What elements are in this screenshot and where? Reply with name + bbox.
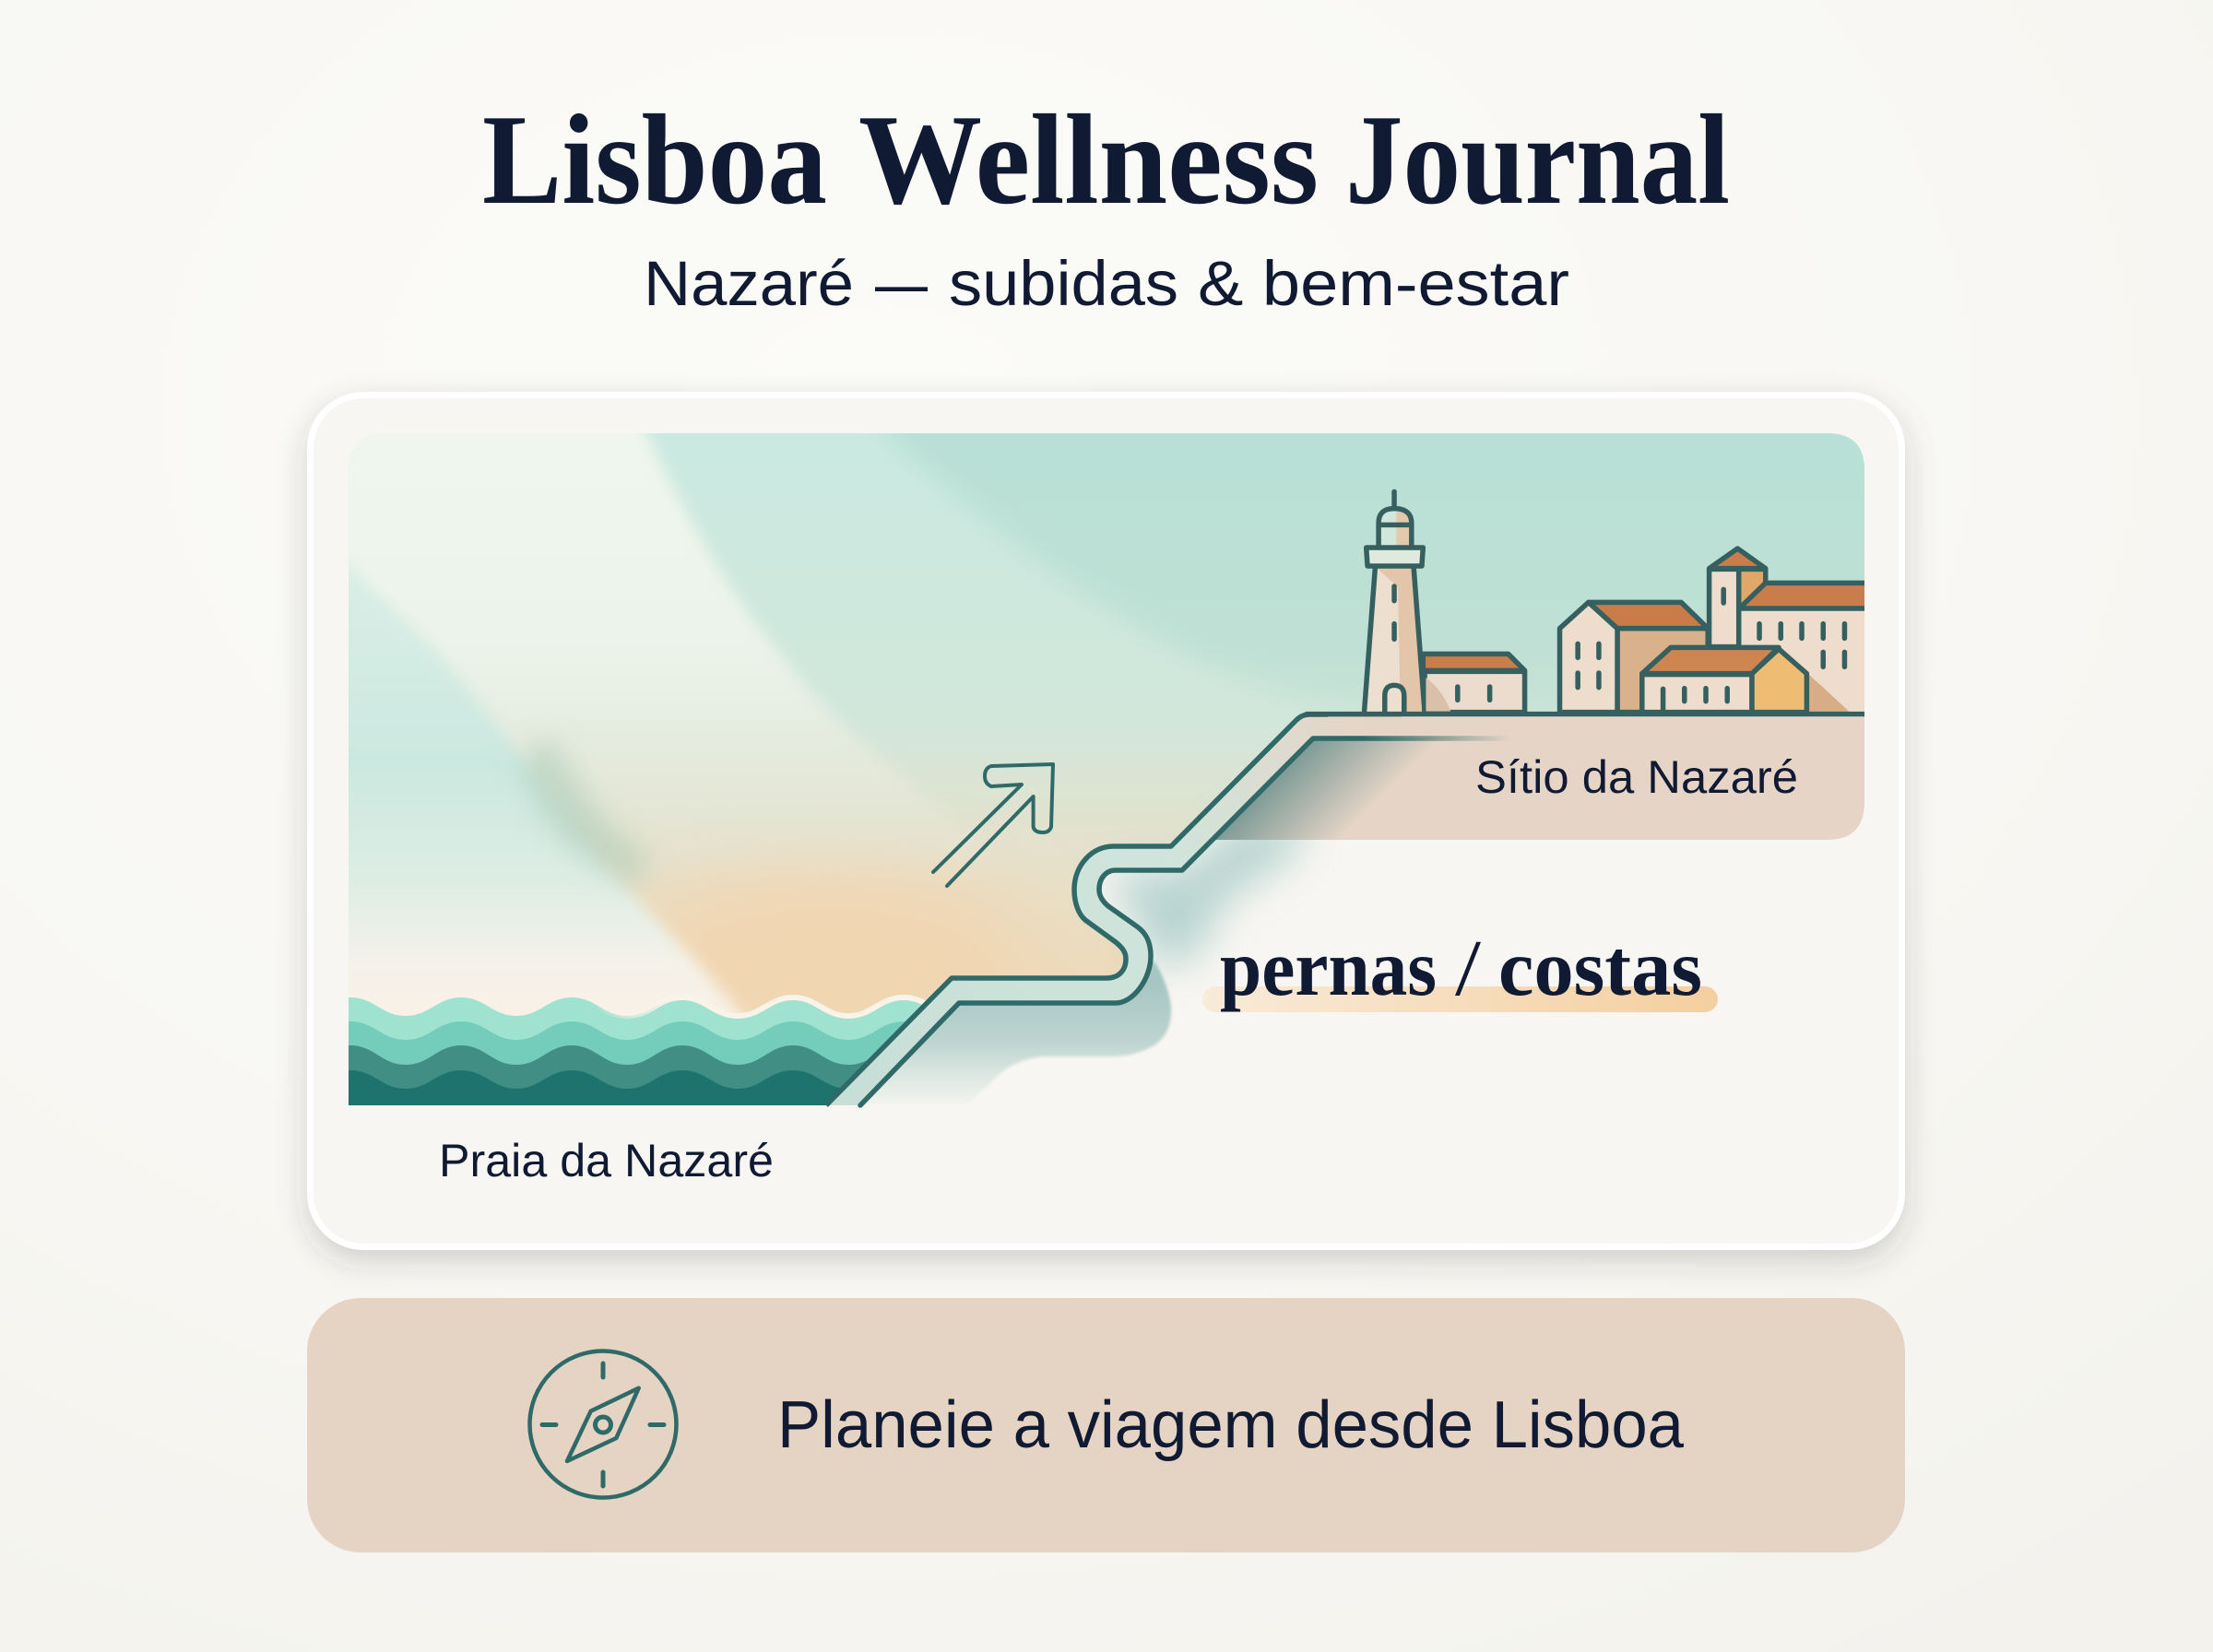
label: Praia da Nazaré: Praia da Nazaré [439,1135,774,1186]
long building and tower [1710,549,1871,713]
ground line [1307,712,1871,716]
town: lighthouse and buildings [1307,491,1871,714]
highlight bar [1202,986,1718,1012]
icon: up arrow [933,764,1053,886]
label: pernas / costas [1220,923,1702,1012]
subtitle: Nazaré [644,248,854,319]
panel: call to action [307,1298,1905,1552]
panel: illustration card [310,395,1901,1246]
waves [349,995,926,1105]
label: pernas / costas: costas [1498,923,1702,1012]
path outline: lower edge [860,738,1313,1105]
infographic page [293,112,1922,1552]
icon: compass [529,1351,677,1497]
subtitle [644,248,1569,319]
path outline: upper edge [826,714,1328,1105]
label: Sítio da Nazaré: Sítio da Nazaré [1475,751,1798,803]
call to action text: Planeie a viagem desde Lisboa [777,1388,1685,1462]
peach panel under the town [1210,717,1864,840]
title: Lisboa [482,88,827,231]
subtitle: subidas [949,248,1178,319]
subtitle: & bem-estar [1198,248,1569,319]
subtitle: — [875,248,928,319]
lighthouse [1364,491,1425,713]
title: Wellness [858,88,1319,231]
label: pernas / costas: / [1455,923,1482,1012]
title: Journal [1345,88,1730,231]
title [482,88,1730,231]
road band with S-bend [826,714,1402,1105]
front house [1642,647,1806,713]
path outline: fading ledge [1313,736,1512,741]
tall house [1560,602,1708,713]
illustration: sky and sea above the path [349,433,1864,1105]
soft shadow under the path [860,820,1309,1105]
small house [1423,654,1525,713]
label: pernas / costas: pernas [1220,923,1437,1012]
